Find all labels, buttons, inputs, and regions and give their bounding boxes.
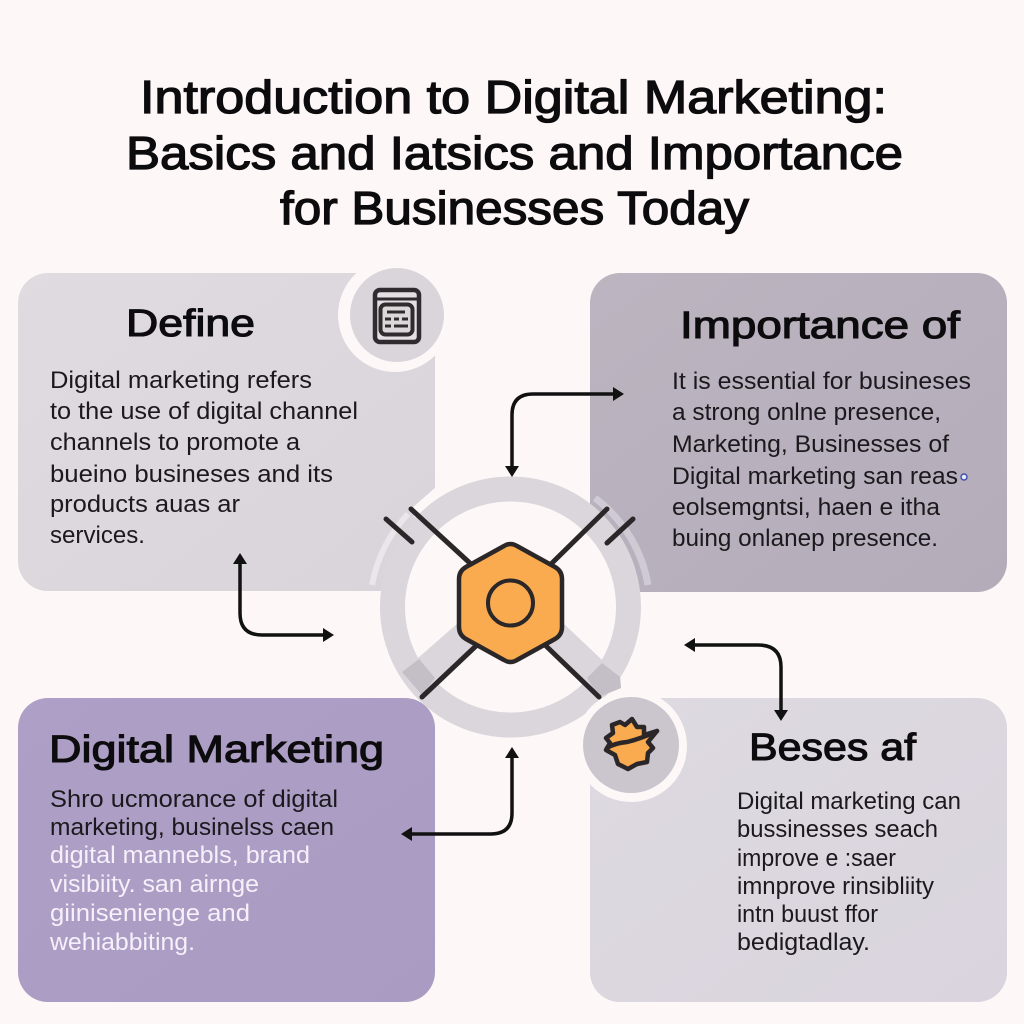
- panel: digital marketing body text: marketing, businelss caen: [50, 814, 334, 841]
- icon: document badge: [338, 258, 452, 372]
- icon: orange hexagon: [459, 544, 562, 662]
- panel: digital marketing body text: visibiity. san airnge: [50, 871, 259, 898]
- panel: beses af body text: bussinesses seach: [737, 816, 938, 843]
- panel: beses af heading: Beses af: [749, 727, 916, 769]
- icon: burst badge: [575, 690, 687, 802]
- title: [126, 71, 903, 234]
- panel: digital marketing body text: [49, 786, 338, 956]
- arrow: left connector: [233, 553, 334, 642]
- panel: beses af body text: bedigtadlay.: [737, 929, 870, 956]
- panel: beses af body text: intn buust ffor: [737, 901, 878, 928]
- panel: importance body text: a strong onlne presence,: [672, 399, 941, 426]
- panel: digital marketing body text: digital mannebls, brand: [50, 842, 310, 869]
- arrow: right connector: [684, 638, 788, 721]
- panel: beses af: [590, 698, 1007, 1002]
- panel: importance body text: Digital marketing san reas: [672, 463, 958, 490]
- panel: importance body text: buing onlanep presence.: [672, 525, 938, 552]
- title: for Businesses Today: [280, 182, 749, 234]
- panel: define body text: Digital marketing refers: [50, 367, 312, 394]
- panel: define body text: services.: [50, 522, 145, 549]
- panel: digital marketing body text: Shro ucmorance of digital: [50, 786, 338, 813]
- panel: digital marketing heading: Digital Marketing: [49, 729, 384, 771]
- arrow: top connector: [505, 387, 624, 477]
- panel: importance body text: It is essential for busineses: [672, 368, 971, 395]
- panel: define heading: Define: [126, 303, 255, 345]
- panel: define body text: products auas ar: [50, 491, 240, 518]
- panel: importance heading: Importance of: [680, 305, 961, 347]
- panel: define: [18, 273, 436, 591]
- panel: beses af body text: imnprove rinsibliity: [737, 873, 934, 900]
- panel: importance body text: Marketing, Businesses of: [672, 431, 949, 458]
- panel: define body text: to the use of digital channel: [50, 398, 358, 425]
- panel: importance body text: [672, 368, 971, 552]
- panel: importance of: [590, 273, 1007, 592]
- panel: define body text: channels to promote a: [50, 429, 301, 456]
- panel: beses af body text: improve e :saer: [737, 845, 896, 872]
- title: Introduction to Digital Marketing:: [140, 71, 887, 123]
- arrow: bottom connector: [401, 747, 519, 841]
- panel: beses af body text: Digital marketing can: [737, 788, 961, 815]
- panel: define body text: [50, 367, 358, 549]
- panel: define body text: bueino busineses and its: [50, 461, 333, 488]
- panel: digital marketing: [18, 698, 435, 1002]
- panel: digital marketing body text: wehiabbiting.: [49, 929, 195, 956]
- panel: beses af body text: [737, 788, 961, 956]
- panel: digital marketing body text: giinisenienge and: [50, 900, 250, 927]
- panel: importance body text: eolsemgntsi, haen e itha: [672, 494, 941, 521]
- central hub diagram: [372, 489, 648, 725]
- title: Basics and Iatsics and Importance: [126, 127, 903, 179]
